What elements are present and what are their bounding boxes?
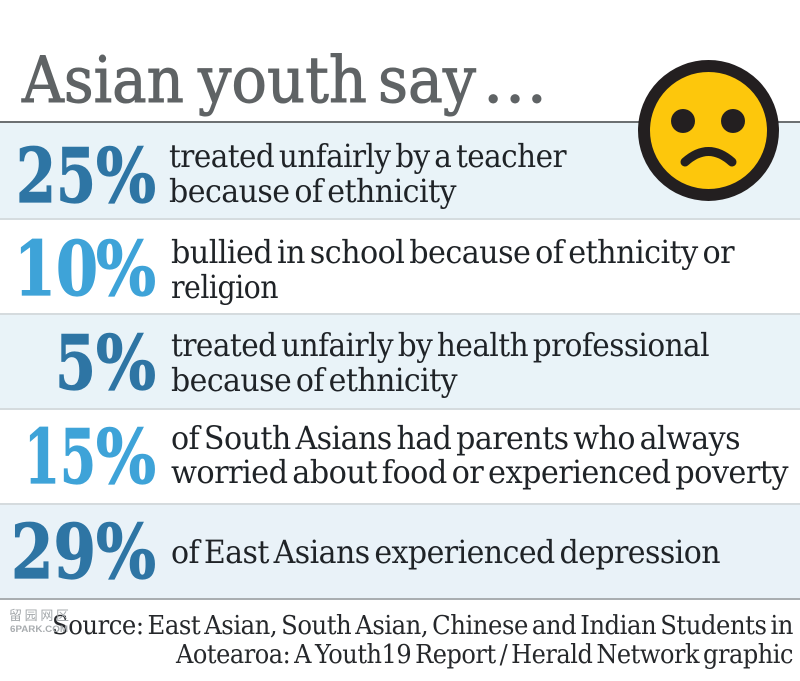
row 5: 29 percent	[11, 508, 720, 596]
row 5 band	[0, 505, 800, 598]
row 2: 10 percent: bullied in school because of ethnicity or	[171, 233, 735, 271]
title: Asian	[21, 44, 184, 118]
row 5: 29 percent: %	[96, 508, 156, 596]
row 3 band	[0, 315, 800, 408]
row 4: 15 percent: %	[96, 413, 156, 501]
row 5: 29 percent: 29	[11, 508, 96, 596]
row 1: 25 percent: %	[96, 132, 156, 220]
row 4: 15 percent	[24, 413, 788, 501]
title: . . .	[483, 44, 547, 118]
row 1 band	[0, 123, 800, 218]
row 1: 25 percent: treated unfairly by a teacher	[169, 137, 567, 175]
row 5: 29 percent: of East Asians experienced depression	[171, 533, 720, 571]
row 3: 5 percent: %	[96, 319, 156, 407]
row 1: 25 percent: because of ethnicity	[169, 172, 456, 210]
row 1: 25 percent	[16, 132, 567, 220]
row 2: 10 percent: 10	[14, 225, 98, 313]
row 3: 5 percent: treated unfairly by health professional	[171, 326, 709, 364]
icon: sad face	[644, 66, 773, 195]
watermark: 6PARK.COM	[10, 624, 68, 634]
watermark: 留园网区	[9, 605, 69, 624]
row 4: 15 percent: of South Asians had parents who always	[171, 419, 740, 457]
row 4: 15 percent: 15	[24, 413, 96, 501]
source text	[52, 611, 794, 670]
row 2: 10 percent: %	[96, 225, 156, 313]
row 1: 25 percent: 25	[16, 132, 96, 220]
title: youth	[197, 44, 367, 118]
row 3: 5 percent	[55, 319, 709, 407]
title	[21, 44, 547, 118]
title: say	[378, 44, 476, 118]
watermark	[9, 605, 69, 634]
row 3: 5 percent: because of ethnicity	[171, 361, 457, 399]
row 2: 10 percent	[14, 225, 735, 313]
row 3: 5 percent: 5	[55, 319, 96, 407]
row 2: 10 percent: religion	[171, 268, 278, 306]
